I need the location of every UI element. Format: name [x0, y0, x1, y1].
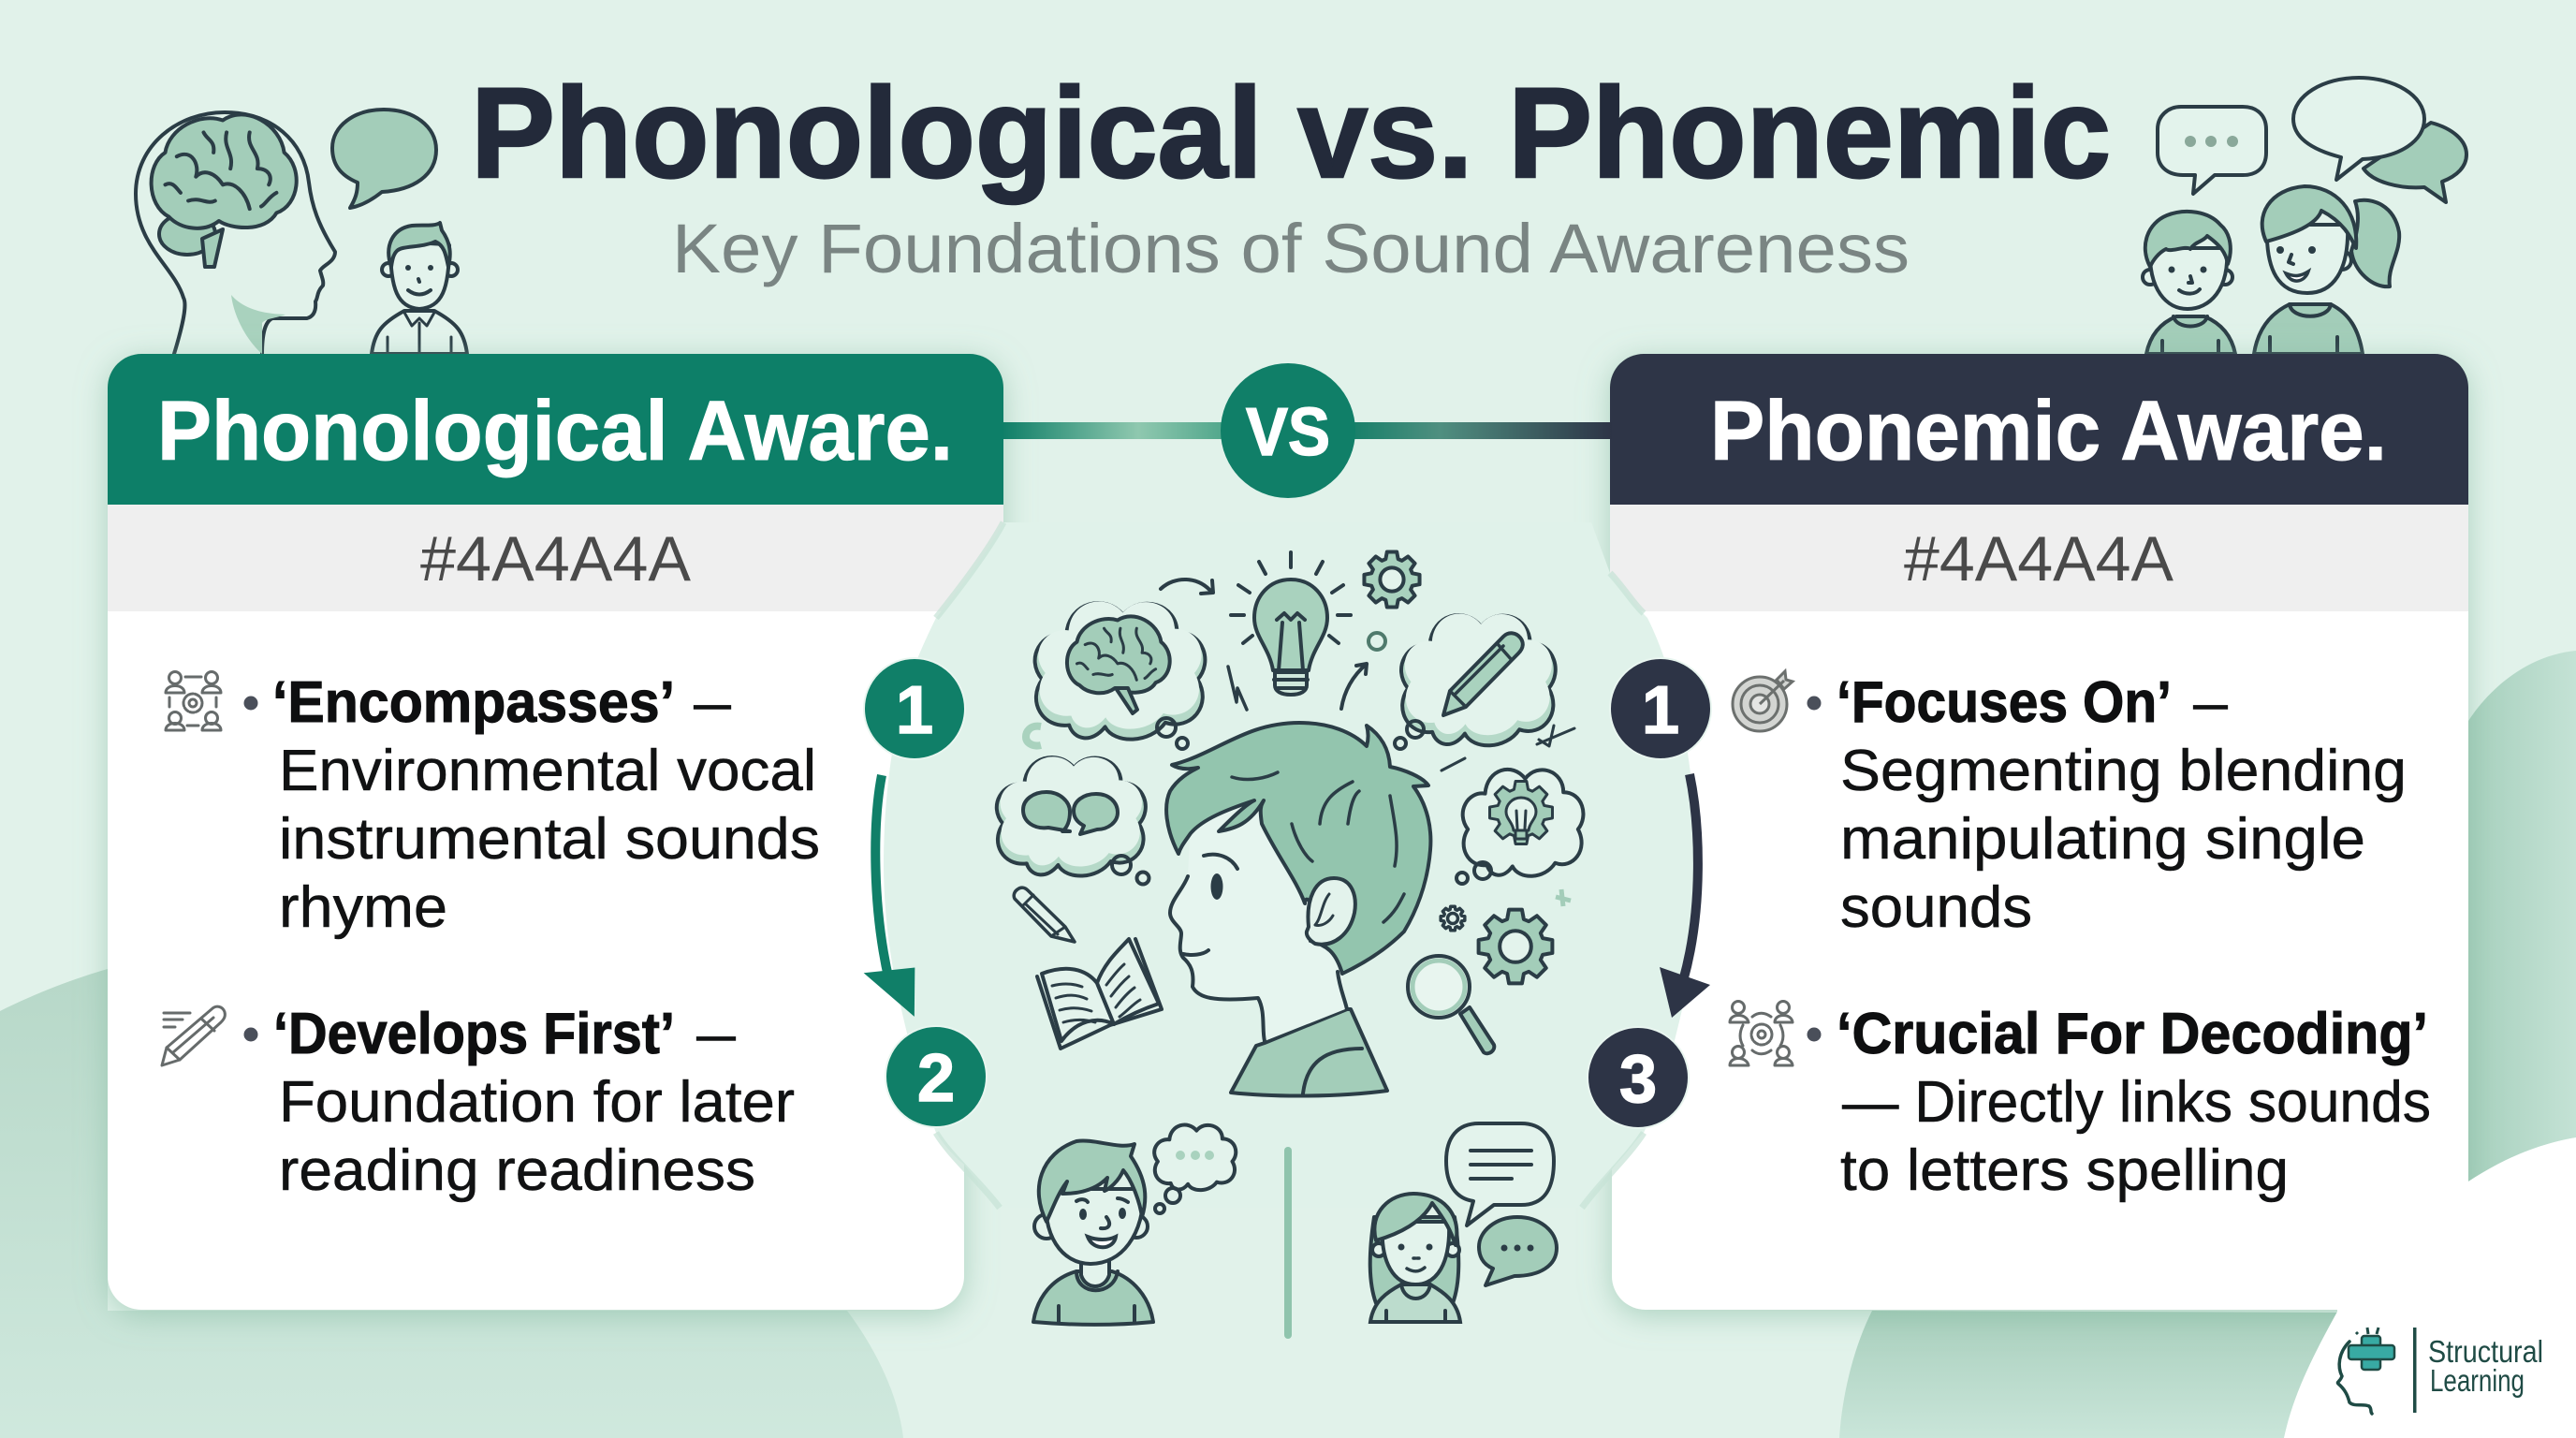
badge 2 left: 2	[917, 1041, 955, 1116]
text: crucial for decoding: ‘Crucial For Decoding’	[1837, 1002, 2428, 1066]
text: focuses on: ‘Focuses On’	[1837, 670, 2172, 735]
panel header	[1610, 354, 2468, 505]
logo cross	[2349, 1336, 2394, 1370]
cloud: speech	[997, 756, 1149, 884]
panel body	[1612, 505, 2468, 1310]
central backdrop edge	[936, 522, 1644, 1208]
neck shade	[231, 295, 285, 354]
connector: right	[1348, 422, 1612, 439]
speech bubble	[332, 110, 436, 208]
text: crucial for decoding: — Directly links sounds	[1842, 1070, 2431, 1135]
illustration: girl with speech	[1370, 1123, 1557, 1322]
panel sub band	[108, 505, 1003, 611]
eye	[1211, 873, 1222, 900]
bullet	[243, 1028, 258, 1041]
girl	[2254, 186, 2399, 354]
text: focuses on: manipulating single	[1840, 807, 2365, 872]
text: encompasses: Environmental vocal	[279, 739, 816, 803]
head outline	[136, 112, 335, 354]
bubble with dots	[2158, 107, 2266, 194]
background blob: right side	[2468, 651, 2576, 1181]
badge 1 left: 1	[896, 673, 933, 748]
logo text: Structural	[2428, 1334, 2543, 1369]
white corner	[2284, 1137, 2576, 1438]
text: focuses on: Segmenting blending	[1840, 739, 2407, 803]
bullet	[243, 697, 258, 710]
gears and magnifier	[1408, 889, 1571, 1053]
text: encompasses	[272, 670, 820, 940]
boy	[2143, 212, 2235, 354]
background blob: left	[0, 969, 903, 1438]
green bubble	[2364, 123, 2466, 202]
illustration: speech bubbles and children	[2143, 78, 2466, 354]
boy profile	[1166, 723, 1430, 1096]
badge 1 right	[1610, 658, 1711, 759]
big bubble	[2293, 78, 2424, 180]
logo divider	[2413, 1328, 2417, 1413]
sub heading right: #4A4A4A	[1904, 523, 2174, 594]
divider	[1284, 1147, 1292, 1339]
panel body	[108, 505, 964, 1310]
text: crucial for decoding: to letters spelling	[1840, 1138, 2289, 1203]
ear	[1307, 878, 1355, 945]
face	[1170, 796, 1348, 1041]
text: develops first: ‘Develops First’	[273, 1002, 675, 1066]
cloud: gear bulb	[1456, 770, 1583, 884]
bullet	[1807, 1028, 1822, 1041]
logo	[2337, 1328, 2543, 1414]
sub heading left: #4A4A4A	[420, 523, 692, 594]
icon: team gear	[1730, 1002, 1793, 1065]
bullet	[1807, 697, 1822, 710]
shirt	[1231, 1009, 1387, 1096]
panel: phonological	[108, 354, 1003, 1310]
speech bubble	[1446, 1123, 1554, 1225]
logo: Learning	[2430, 1363, 2525, 1398]
text: focuses on: sounds	[1840, 875, 2032, 940]
panel: phonemic	[1610, 354, 2468, 1310]
icon: pencil	[162, 1006, 225, 1065]
gear top	[1364, 551, 1420, 608]
text: develops first: —	[696, 1002, 736, 1066]
text: develops first: Foundation for later	[279, 1070, 795, 1135]
badge 2 left	[886, 1026, 987, 1127]
text: encompasses: rhyme	[279, 875, 447, 940]
illustration: boy thinking	[997, 551, 1583, 1096]
arrow: left	[864, 775, 920, 1021]
open book	[1037, 939, 1162, 1049]
green bubble	[1479, 1217, 1557, 1285]
heading: phonemic: Phonemic Aware.	[1710, 385, 2387, 478]
hair	[1166, 723, 1430, 974]
badge 1 left	[864, 658, 965, 759]
text: crucial for decoding	[1837, 1002, 2431, 1203]
man	[372, 223, 467, 354]
cloud: brain	[1035, 602, 1205, 749]
badge 3 right: 3	[1619, 1042, 1657, 1117]
central backdrop	[884, 522, 1696, 1208]
arrow: right	[1660, 774, 1710, 1018]
text: encompasses: ‘Encompasses’	[272, 670, 675, 735]
text: encompasses: instrumental sounds	[279, 807, 820, 872]
text: develops first	[273, 1002, 795, 1203]
cloud: pencil	[1395, 613, 1556, 749]
icon: target	[1733, 671, 1793, 731]
text: encompasses: —	[694, 670, 731, 735]
text: focuses on	[1837, 670, 2407, 940]
text: focuses on: —	[2193, 670, 2228, 735]
panel sub band	[1610, 505, 2468, 611]
text: develops first: reading readiness	[279, 1138, 755, 1203]
panel header	[108, 354, 1003, 505]
illustration: head with brain and man	[136, 110, 467, 354]
subtitle: Key Foundations of Sound Awareness	[672, 210, 1910, 287]
logo head	[2337, 1342, 2372, 1414]
badge 3 right	[1588, 1027, 1689, 1128]
heading: phonological: Phonological Aware.	[157, 385, 953, 478]
badge 1 right: 1	[1642, 673, 1679, 748]
hair lines	[1232, 772, 1404, 922]
connector: left	[1003, 422, 1228, 439]
light bulb	[1231, 552, 1351, 695]
thought cloud	[1154, 1125, 1236, 1213]
title: Phonological vs. Phonemic	[471, 62, 2111, 205]
background blob: bottom right	[1839, 1311, 2337, 1438]
VS badge: VS	[1246, 395, 1330, 470]
arrows and marks	[1026, 580, 1574, 770]
small pencil	[1014, 888, 1075, 942]
illustration: boy with thought bubble	[1033, 1125, 1236, 1325]
brain	[152, 114, 297, 267]
VS badge	[1221, 363, 1355, 498]
icon: network	[166, 672, 221, 730]
